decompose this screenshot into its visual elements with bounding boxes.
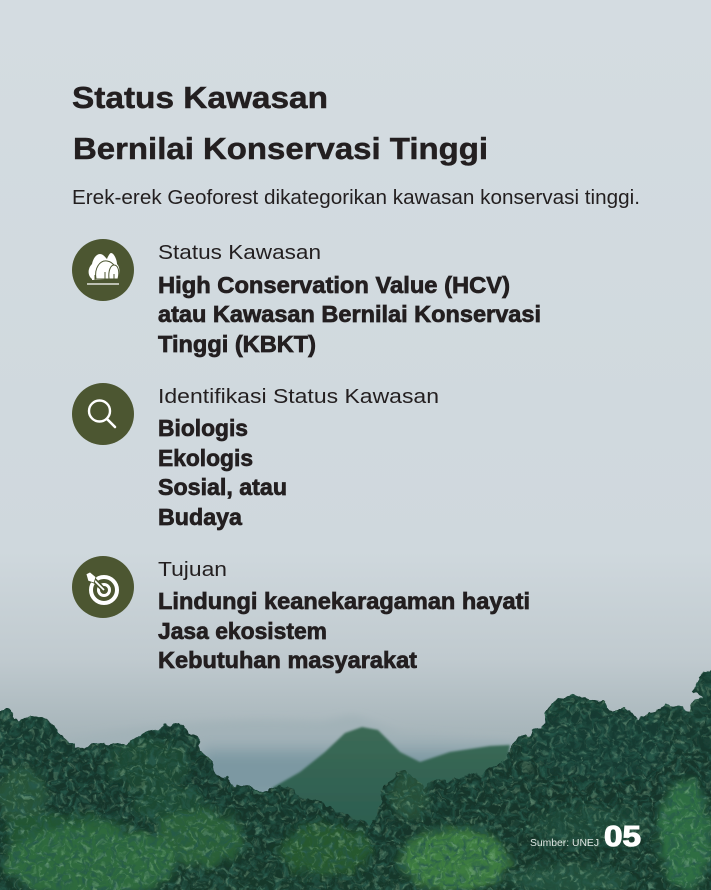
list: identification criteria: Sosial, atau (158, 474, 287, 500)
tree foliage masses (0, 710, 711, 890)
list: goals: Kebutuhan masyarakat (158, 647, 417, 673)
section: identifikasi status kawasan (72, 383, 439, 530)
list: goals: Lindungi keanekaragaman hayati (158, 588, 530, 614)
icon: target with arrow (72, 556, 134, 618)
section: status kawasan (72, 239, 541, 357)
distant haze mountains (60, 716, 520, 800)
title (72, 80, 488, 166)
label: status kawasan: Status Kawasan (158, 241, 321, 264)
foliage grain (0, 655, 711, 890)
list: goals: Jasa ekosistem (158, 618, 327, 644)
text: high conservation value: Tinggi (KBKT) (158, 331, 316, 357)
list: identification criteria: Biologis (158, 415, 248, 441)
title: Bernilai Konservasi Tinggi (73, 131, 488, 166)
list: goals (158, 588, 530, 673)
list: identification criteria: Ekologis (158, 445, 253, 471)
section: tujuan (72, 556, 530, 673)
subtitle: Erek-erek Geoforest dikategorikan kawasan konservasi tinggi. (72, 186, 640, 209)
text: high conservation value (158, 272, 541, 357)
list: identification criteria: Budaya (158, 504, 242, 530)
label: tujuan: Tujuan (158, 558, 227, 581)
distant hill (272, 727, 510, 830)
text: high conservation value: atau Kawasan Bernilai Konservasi (158, 301, 541, 327)
forest canopy (0, 655, 711, 890)
valley haze (200, 750, 520, 800)
source credit: Sumber: UNEJ (530, 837, 599, 849)
text: high conservation value: High Conservation Value (HCV) (158, 272, 510, 298)
label: identifikasi: Identifikasi Status Kawasan (158, 385, 439, 408)
icon: trees (72, 239, 134, 301)
photo: forest landscape (0, 655, 711, 890)
title: Status Kawasan (72, 80, 328, 115)
list: identification criteria (158, 415, 287, 530)
page number: 05 (604, 821, 641, 853)
icon: magnifier (72, 383, 134, 445)
